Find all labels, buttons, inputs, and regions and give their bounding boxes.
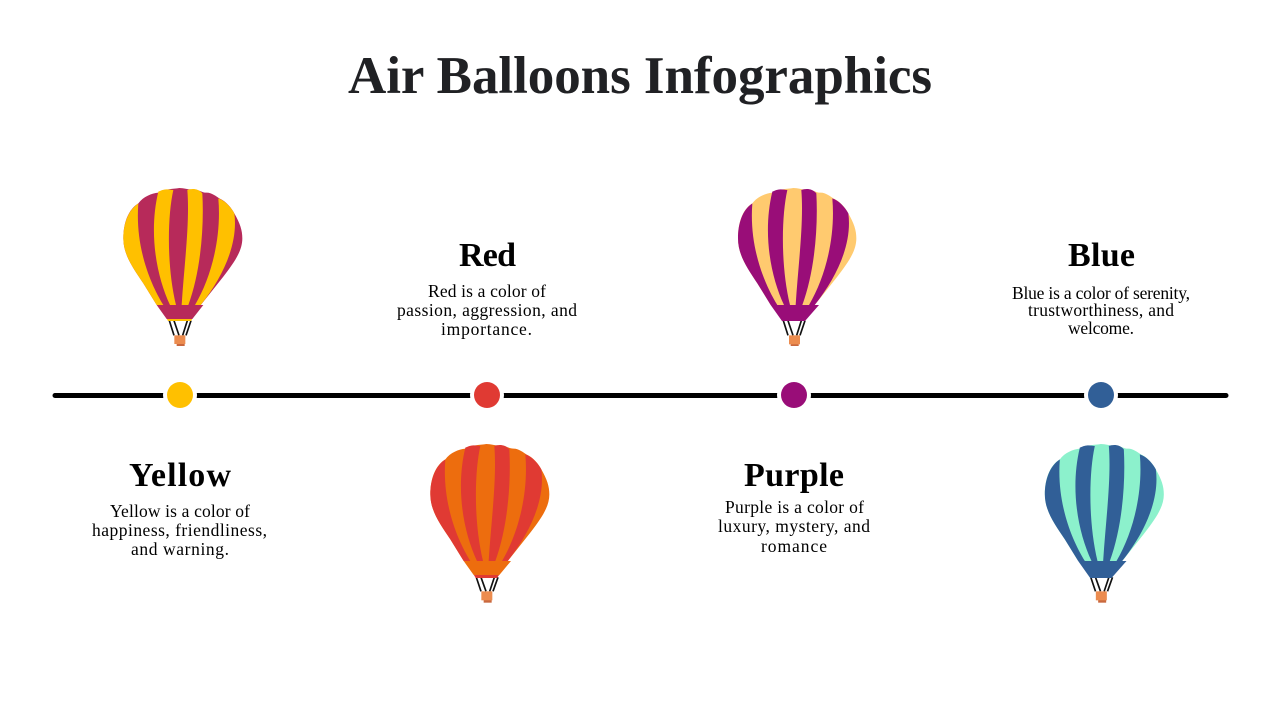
text block: blue: Blue (1068, 237, 1135, 274)
text block: purple: Purple (744, 457, 844, 494)
text block: yellow: and warning. (131, 539, 229, 559)
text block: purple (718, 457, 870, 556)
text block: red (397, 237, 577, 339)
title: Air Balloons Infographics (348, 47, 932, 105)
text block: red: Red is a color of (428, 281, 546, 301)
text block: red: Red (459, 237, 516, 274)
balloon: red (430, 444, 549, 603)
text block: blue: Blue is a color of serenity, (1012, 283, 1190, 303)
text block: blue (1012, 237, 1190, 338)
text block: blue: trustworthiness, and (1028, 300, 1174, 320)
text block: yellow: Yellow (129, 457, 231, 494)
text block: yellow: Yellow is a color of (110, 501, 250, 521)
text block: red: passion, aggression, and (397, 300, 577, 320)
text block: red: importance. (441, 319, 532, 339)
text block: yellow: happiness, friendliness, (92, 520, 267, 540)
balloon: purple (738, 188, 856, 346)
balloon: yellow (123, 188, 242, 346)
balloon: blue (1045, 444, 1164, 603)
text block: purple: romance (761, 536, 827, 556)
text block: purple: luxury, mystery, and (718, 516, 870, 536)
timeline (55, 378, 1226, 412)
text block: purple: Purple is a color of (725, 497, 864, 517)
text block: blue: welcome. (1068, 318, 1134, 338)
text block: yellow (92, 457, 267, 559)
